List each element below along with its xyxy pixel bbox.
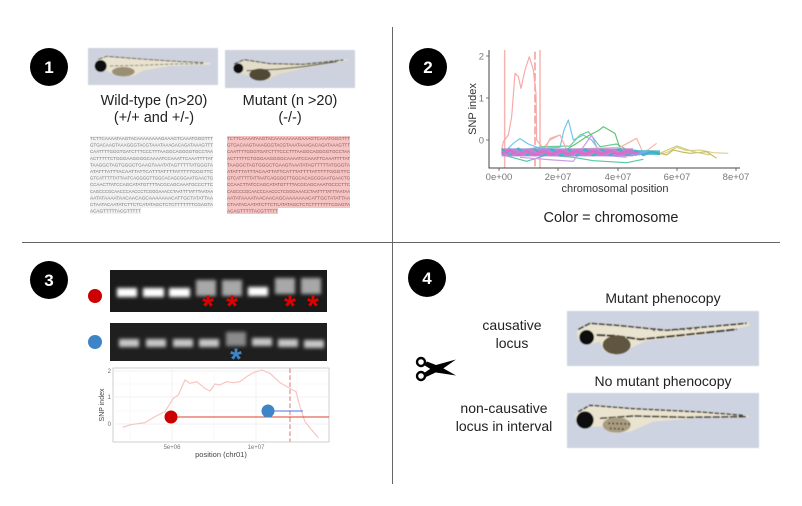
photo: mutant phenocopy larva xyxy=(567,311,759,366)
sequence: wild-type: CCAACTTATCCAGCATATGTTTTACGCAGCAAATGCCCTTC xyxy=(90,182,213,188)
x-axis title: position (chr01) xyxy=(195,450,247,459)
sequence: mutant: AATATAAAATAACAACAGCAAAAAAACATTGCTATATTAA xyxy=(227,195,351,201)
label: wild-type: (+/+ and +/-) xyxy=(114,110,194,126)
x-axis ticks: 1e+07 xyxy=(248,445,265,451)
label: mutant: Mutant (n >20) xyxy=(243,93,337,109)
sequence: mutant: ACTTTTTCTGGGAAGGGGCAAAATCCAAATTCAAATTTTAT xyxy=(227,156,350,162)
x-axis ticks: 5e+06 xyxy=(164,445,181,451)
red asterisks: * xyxy=(284,290,296,323)
badge 1: 1 xyxy=(44,58,54,77)
chart: SNP index chr01 xyxy=(99,368,329,459)
sequence: wild-type: TAAGGCTAGTGGGCTGAAGTAAATATAGTTTTTATGGGTA xyxy=(90,162,214,168)
x-axis title: chromosomal position xyxy=(562,183,668,195)
chart: SNP index by chromosomal position xyxy=(467,50,749,195)
sequence: mutant: CAGCCCGCAACCCAACCCTCGGGAAACCTAATTTTATTTAATAA xyxy=(227,189,351,195)
blue marker xyxy=(262,404,274,418)
y-axis ticks: 0 xyxy=(479,136,484,146)
label: non-causative locus: locus in interval xyxy=(456,418,552,434)
gel 2 xyxy=(110,323,327,376)
red asterisks: * xyxy=(226,290,238,323)
photo: mutant larva xyxy=(225,50,355,88)
sequence: mutant xyxy=(227,136,351,215)
blue interval line xyxy=(268,410,303,412)
sequence: wild-type: ACTTTTTCTGGGAAGGGGCAAAATCCAAATTCAAATTTTAT xyxy=(90,156,213,162)
sequence: mutant: CAATTTTGGGTGATCTTTCCCTTTAAGGCAGGGGTGCCTAA xyxy=(227,149,351,155)
sequence: wild-type xyxy=(90,136,214,215)
caption: Color = chromosome xyxy=(544,210,678,226)
sequence: wild-type: CAGCCCGCAACCCAACCCTCGGGAAACCTAATTTTATTTAATAA xyxy=(90,189,214,195)
label: wild-type: Wild-type (n>20) xyxy=(101,93,207,109)
sequence: wild-type: ACAGTTTTTACGTTTTT xyxy=(90,209,141,215)
red asterisks: * xyxy=(202,290,214,323)
x-axis ticks: 0e+00 xyxy=(486,172,512,183)
badge 2 xyxy=(409,48,447,86)
red asterisks: * xyxy=(307,290,319,323)
sequence: wild-type: GTCATTTTTATTAATCAGGGGTTGGCACAGCGGAATGAACTG xyxy=(90,176,213,182)
icon: scissors xyxy=(417,358,456,380)
badge 2: 2 xyxy=(423,58,433,77)
sequence: mutant: TAAGGCTAGTGGGCTGAAGTAAATATAGTTTTTATGGGTA xyxy=(227,162,351,168)
x-axis ticks: 4e+07 xyxy=(605,172,631,183)
blue asterisk: * xyxy=(230,343,242,376)
y-axis ticks: 1 xyxy=(479,94,484,104)
heading: no mutant phenocopy: No mutant phenocopy xyxy=(595,373,731,389)
sequence: mutant: TCTTCAAAATAAGTACAAAAAAAAGAAAGTCAAATGGGTTT xyxy=(227,136,350,142)
sequence: mutant: GTGACAAGTAAAGGGTACGTAAATAAAGACAGATAAAGTTT xyxy=(227,143,350,149)
sequence: wild-type: CAATTTTGGGTGATCTTTCCCTTTAAGGCAGGGGTGCCTAA xyxy=(90,149,214,155)
badge 1 xyxy=(30,48,68,86)
sequence: wild-type: TCTTCAAAATAAGTACAAAAAAAAGAAAGTCAAATGGGTTT xyxy=(90,136,213,142)
sequence: mutant: CCAACTTATCCAGCATATGTTTTACGCAGCAAATGCCCTTC xyxy=(227,182,350,188)
sequence: mutant: ACAGTTTTTACGTTTTT xyxy=(227,209,278,215)
x-axis ticks: 2e+07 xyxy=(545,172,571,183)
y-axis title: SNP index xyxy=(99,388,106,421)
y-axis ticks xyxy=(479,52,484,146)
y-axis ticks: 0 xyxy=(108,422,112,428)
badge 3 xyxy=(30,261,68,299)
sequence: mutant: ATATTTATTTACAATTATTCATTTATTTTATTTTTGGGTTC xyxy=(227,169,351,175)
panel 1: wild-type versus mutant xyxy=(30,48,355,215)
label: mutant: (-/-) xyxy=(278,110,302,126)
photo: no phenocopy larva xyxy=(567,393,759,448)
marker: red locus xyxy=(88,289,102,303)
panel 2: SNP index chart xyxy=(409,48,749,226)
panel 4: CRISPR phenocopy test xyxy=(408,259,759,448)
label: non-causative locus: non-causative xyxy=(460,400,548,416)
sequence: wild-type: AATATAAAATAACAACAGCAAAAAAACATTGCTATATTAA xyxy=(90,195,214,201)
sequence: wild-type: GTGACAAGTAAAGGGTACGTAAATAAAGACAGATAAAGTTT xyxy=(90,143,213,149)
sequence: wild-type: CTAATACAATATCTTCTCATATAGCTCTCTTTTTTTCGAGTA xyxy=(90,202,214,208)
gel 1 xyxy=(110,270,327,323)
badge 4 xyxy=(408,259,446,297)
y-axis ticks: 2 xyxy=(479,52,484,62)
red asterisks xyxy=(202,290,319,323)
x-axis ticks xyxy=(486,172,749,183)
heading: mutant phenocopy: Mutant phenocopy xyxy=(605,290,721,306)
x-axis ticks: 8e+07 xyxy=(723,172,749,183)
marker: blue locus xyxy=(88,335,102,349)
y-axis ticks: 1 xyxy=(108,395,112,401)
x-axis ticks xyxy=(164,445,265,451)
badge 4: 4 xyxy=(422,269,432,288)
y-axis title: SNP index xyxy=(467,83,479,135)
sequence: mutant: GTCATTTTTATTAATCAGGGGTTGGCACAGCGGAATGAACTG xyxy=(227,176,350,182)
badge 3: 3 xyxy=(44,271,54,290)
photo: wild-type larva xyxy=(88,48,218,85)
red interval line xyxy=(171,416,329,418)
y-axis ticks xyxy=(108,369,112,428)
x-axis ticks: 6e+07 xyxy=(664,172,690,183)
red marker xyxy=(164,410,178,424)
sequence: mutant: CTAATACAATATCTTCTCATATAGCTCTCTTTTTTTCGAGTA xyxy=(227,202,351,208)
label: causative locus: causative xyxy=(482,317,542,333)
sequence: wild-type: ATATTTATTTACAATTATTCATTTATTTTATTTTTGGGTTC xyxy=(90,169,214,175)
label: causative locus: locus xyxy=(496,335,528,351)
y-axis ticks: 2 xyxy=(108,369,112,375)
panel 3: genotyping gels and SNP plot xyxy=(30,261,329,459)
